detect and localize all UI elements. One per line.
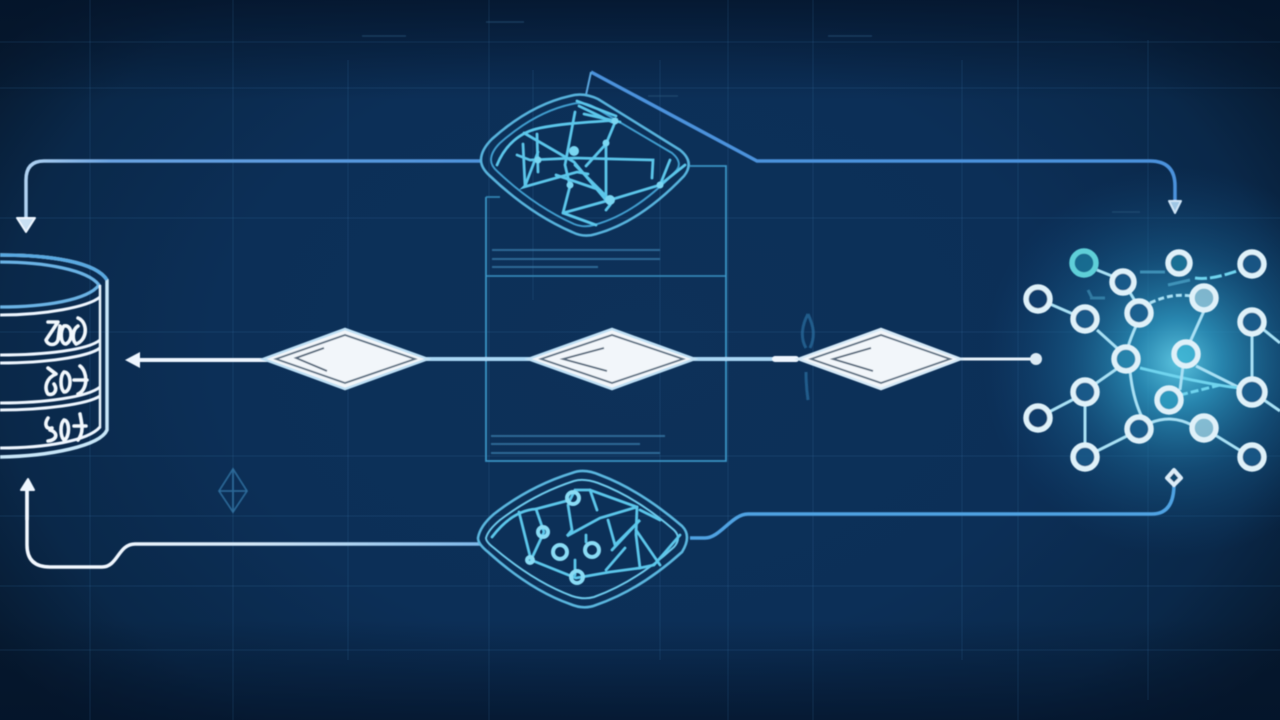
icon: top network shield: [481, 95, 689, 236]
connector: bottom flow to database: [21, 479, 480, 567]
icon: database cylinder: [0, 255, 107, 457]
connector: bottom flow to network: [690, 470, 1181, 538]
panel: central document frame: [486, 166, 726, 461]
database row glyphs: [46, 318, 87, 441]
diamond: right decision: [798, 329, 961, 389]
glow behind network: [960, 160, 1280, 560]
icon: faint upload shape: [802, 314, 813, 400]
network graph: [1026, 251, 1280, 469]
faint header marks: [362, 22, 1140, 212]
connector: top flow to network: [586, 72, 1181, 213]
icon: line end dot: [1030, 353, 1042, 365]
network nodes: [1026, 251, 1265, 469]
network links: [1049, 270, 1280, 451]
faint text lines, upper: [492, 250, 660, 267]
icon: faint small diamond: [219, 469, 247, 512]
connector: central horizontal flow: [125, 352, 1042, 368]
icon: left arrow head: [125, 352, 140, 368]
icon: arrow head down right: [1169, 201, 1181, 213]
diamond: left decision: [263, 329, 428, 389]
diamond: centre decision: [528, 329, 695, 389]
faint text lines, lower: [491, 436, 665, 453]
icon: arrow head node: [1167, 470, 1181, 485]
connector: top flow to database: [17, 161, 480, 232]
icon: bottom network shield: [478, 471, 687, 607]
icon: arrow head down: [17, 218, 35, 232]
icon: arrow head up: [21, 479, 34, 490]
